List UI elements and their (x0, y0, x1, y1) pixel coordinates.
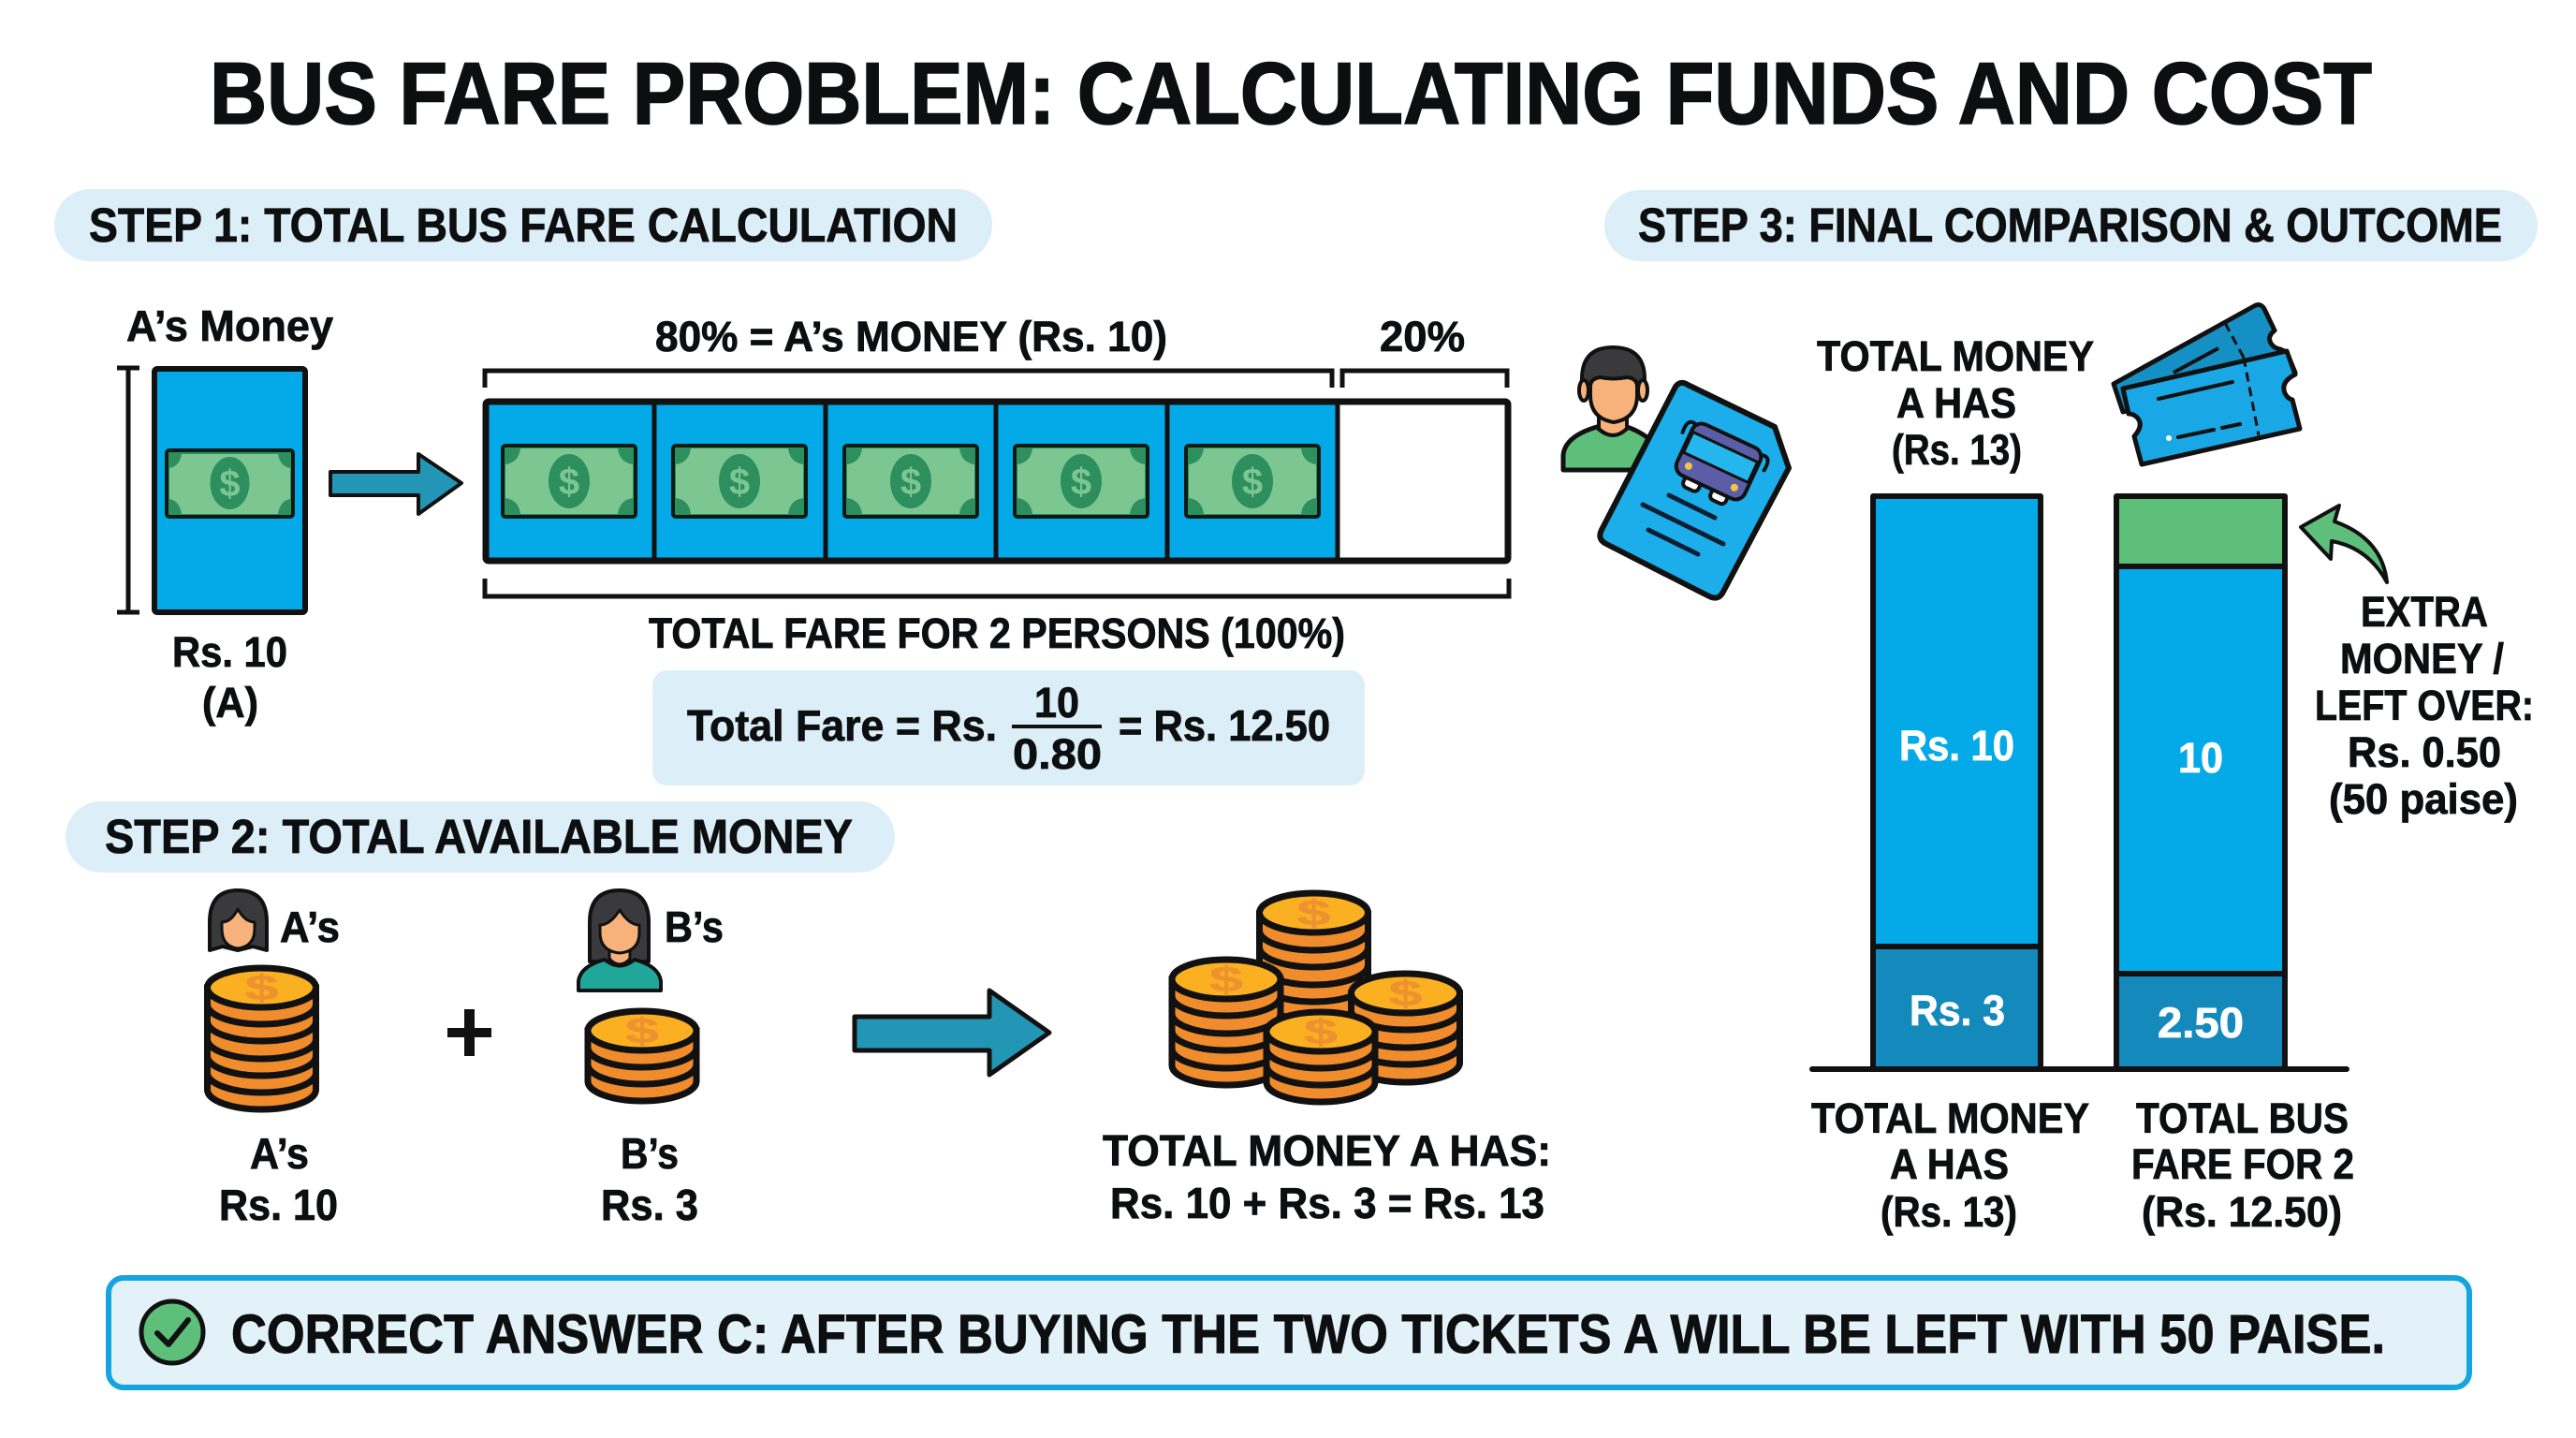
callout: extra money (2315, 588, 2534, 823)
step 1 heading (54, 189, 992, 261)
label: total bus fare under bar: (Rs. 12.50) (2142, 1188, 2342, 1236)
label: total money A has (1103, 1126, 1551, 1227)
icon: bus ticket document (1600, 383, 1789, 598)
comparison bar chart (1809, 496, 2349, 1072)
label: total bus fare under bar (2131, 1094, 2354, 1236)
label: total money under bar (1811, 1094, 2089, 1236)
arrow: extra money (2301, 506, 2387, 582)
label: Rs. 10 (A) (172, 628, 287, 726)
label: total bus fare under bar: TOTAL BUS (2136, 1094, 2349, 1142)
label: total money A has top: A HAS (1896, 379, 2016, 427)
left stack (1172, 960, 1281, 1085)
back stack (1260, 893, 1368, 1036)
label: B's Rs. 3: B’s (621, 1129, 679, 1178)
bar: total money A has (1873, 496, 2041, 1069)
right stack (1352, 974, 1460, 1082)
icon: man (1563, 347, 1661, 470)
title: BUS FARE PROBLEM: CALCULATING FUNDS AND COST (210, 44, 2372, 142)
label: 20 percent: 20% (1380, 313, 1465, 360)
bill 1 (503, 446, 636, 517)
label: total money A has top: (Rs. 13) (1892, 426, 2022, 474)
icon: person B (578, 890, 661, 990)
icon: check mark (141, 1301, 203, 1363)
label: total money under bar: (Rs. 13) (1881, 1188, 2017, 1236)
label: total bus fare under bar: FARE FOR 2 (2131, 1140, 2354, 1188)
left stack: $ (1209, 961, 1243, 1000)
callout: extra money: LEFT OVER: (2315, 682, 2534, 729)
label: total money under bar: A HAS (1890, 1140, 2009, 1188)
bill 2: $ (729, 462, 750, 503)
bracket: 80 percent (485, 371, 1332, 388)
label: B's beside icon: B’s (665, 902, 724, 951)
front stack (1266, 1012, 1375, 1102)
label: total money A has top (1817, 332, 2094, 474)
back stack: $ (1297, 894, 1331, 933)
label: A's Rs. 10 (219, 1129, 338, 1229)
bar: total bus fare: 10 (2178, 734, 2223, 782)
callout: extra money: EXTRA (2361, 588, 2488, 636)
icon: coin stack B: $ (625, 1012, 659, 1051)
right stack: $ (1389, 975, 1423, 1014)
label: A's money: A’s Money (126, 301, 333, 350)
formula box: 0.80 (1013, 730, 1102, 778)
label: total money A has top: TOTAL MONEY (1817, 332, 2094, 380)
arrow: to total (855, 990, 1049, 1075)
label: B's Rs. 3 (601, 1129, 698, 1229)
label: A's Rs. 10: Rs. 10 (219, 1181, 338, 1229)
callout: extra money: (50 paise) (2329, 775, 2518, 823)
arrow: block to fare bar (330, 454, 461, 514)
formula box (652, 670, 1365, 785)
fare bar (486, 402, 1508, 561)
bill 1: $ (559, 462, 579, 503)
label: Rs. 10 (A): Rs. 10 (172, 628, 287, 676)
label: total money under bar: TOTAL MONEY (1811, 1094, 2089, 1142)
panel: step 2 (66, 801, 1551, 1229)
label: B's Rs. 3: Rs. 3 (601, 1181, 698, 1229)
height ruler (117, 367, 139, 613)
step 1 heading: STEP 1: TOTAL BUS FARE CALCULATION (89, 198, 958, 252)
label: total money A has: TOTAL MONEY A HAS: (1103, 1126, 1551, 1175)
bill 4: $ (1071, 462, 1091, 503)
baseline axis (1809, 1066, 2349, 1072)
answer text: CORRECT ANSWER C: AFTER BUYING THE TWO TICKETS A WILL BE LEFT WITH 50 PAISE. (231, 1304, 2385, 1365)
formula box: = Rs. 12.50 (1119, 701, 1330, 750)
bracket: total fare (485, 579, 1509, 596)
front stack: $ (1304, 1013, 1338, 1052)
icon: tickets (2114, 305, 2300, 464)
icon: coin stack A (208, 968, 316, 1109)
A's money block with bill (154, 369, 305, 612)
icon: coin pile (1172, 893, 1460, 1102)
A's money block with bill: $ (219, 463, 241, 505)
bus (1661, 417, 1771, 515)
bill 3 (844, 446, 977, 517)
icon: coin stack A: $ (245, 969, 279, 1008)
bill 4 (1015, 446, 1148, 517)
label: total money A has: Rs. 10 + Rs. 3 = Rs. 13 (1110, 1179, 1544, 1227)
bar: total money A has: Rs. 3 (1910, 987, 2005, 1034)
answer banner (109, 1278, 2469, 1387)
bar: total money A has: Rs. 10 (1899, 722, 2014, 770)
label: Rs. 10 (A): (A) (202, 679, 258, 726)
bill 5: $ (1242, 462, 1263, 503)
label: 80 percent: 80% = A’s MONEY (Rs. 10) (655, 313, 1167, 360)
bill 3: $ (900, 462, 921, 503)
formula box: Total Fare = Rs. (687, 701, 997, 750)
bill 5 (1186, 446, 1319, 517)
bar: total bus fare: 2.50 (2158, 999, 2244, 1047)
label: A's beside icon: A’s (280, 902, 340, 951)
plus sign (447, 1009, 491, 1056)
callout: extra money: Rs. 0.50 (2348, 728, 2501, 776)
step 2 heading: STEP 2: TOTAL AVAILABLE MONEY (105, 810, 853, 863)
panel: step 3 (1563, 190, 2538, 1236)
bill 2 (673, 446, 806, 517)
bar: total bus fare (2116, 496, 2285, 1069)
icon: person A (210, 890, 267, 950)
label: A's Rs. 10: A’s (250, 1129, 309, 1178)
formula box: 10 (1034, 679, 1079, 726)
bracket: 20 percent (1342, 371, 1507, 388)
label: total fare for 2 persons: TOTAL FARE FOR 2 PERSONS (100%) (649, 609, 1345, 657)
callout: extra money: MONEY / (2340, 635, 2504, 682)
panel: step 1 (54, 189, 1509, 785)
icon: coin stack B (588, 1011, 696, 1101)
